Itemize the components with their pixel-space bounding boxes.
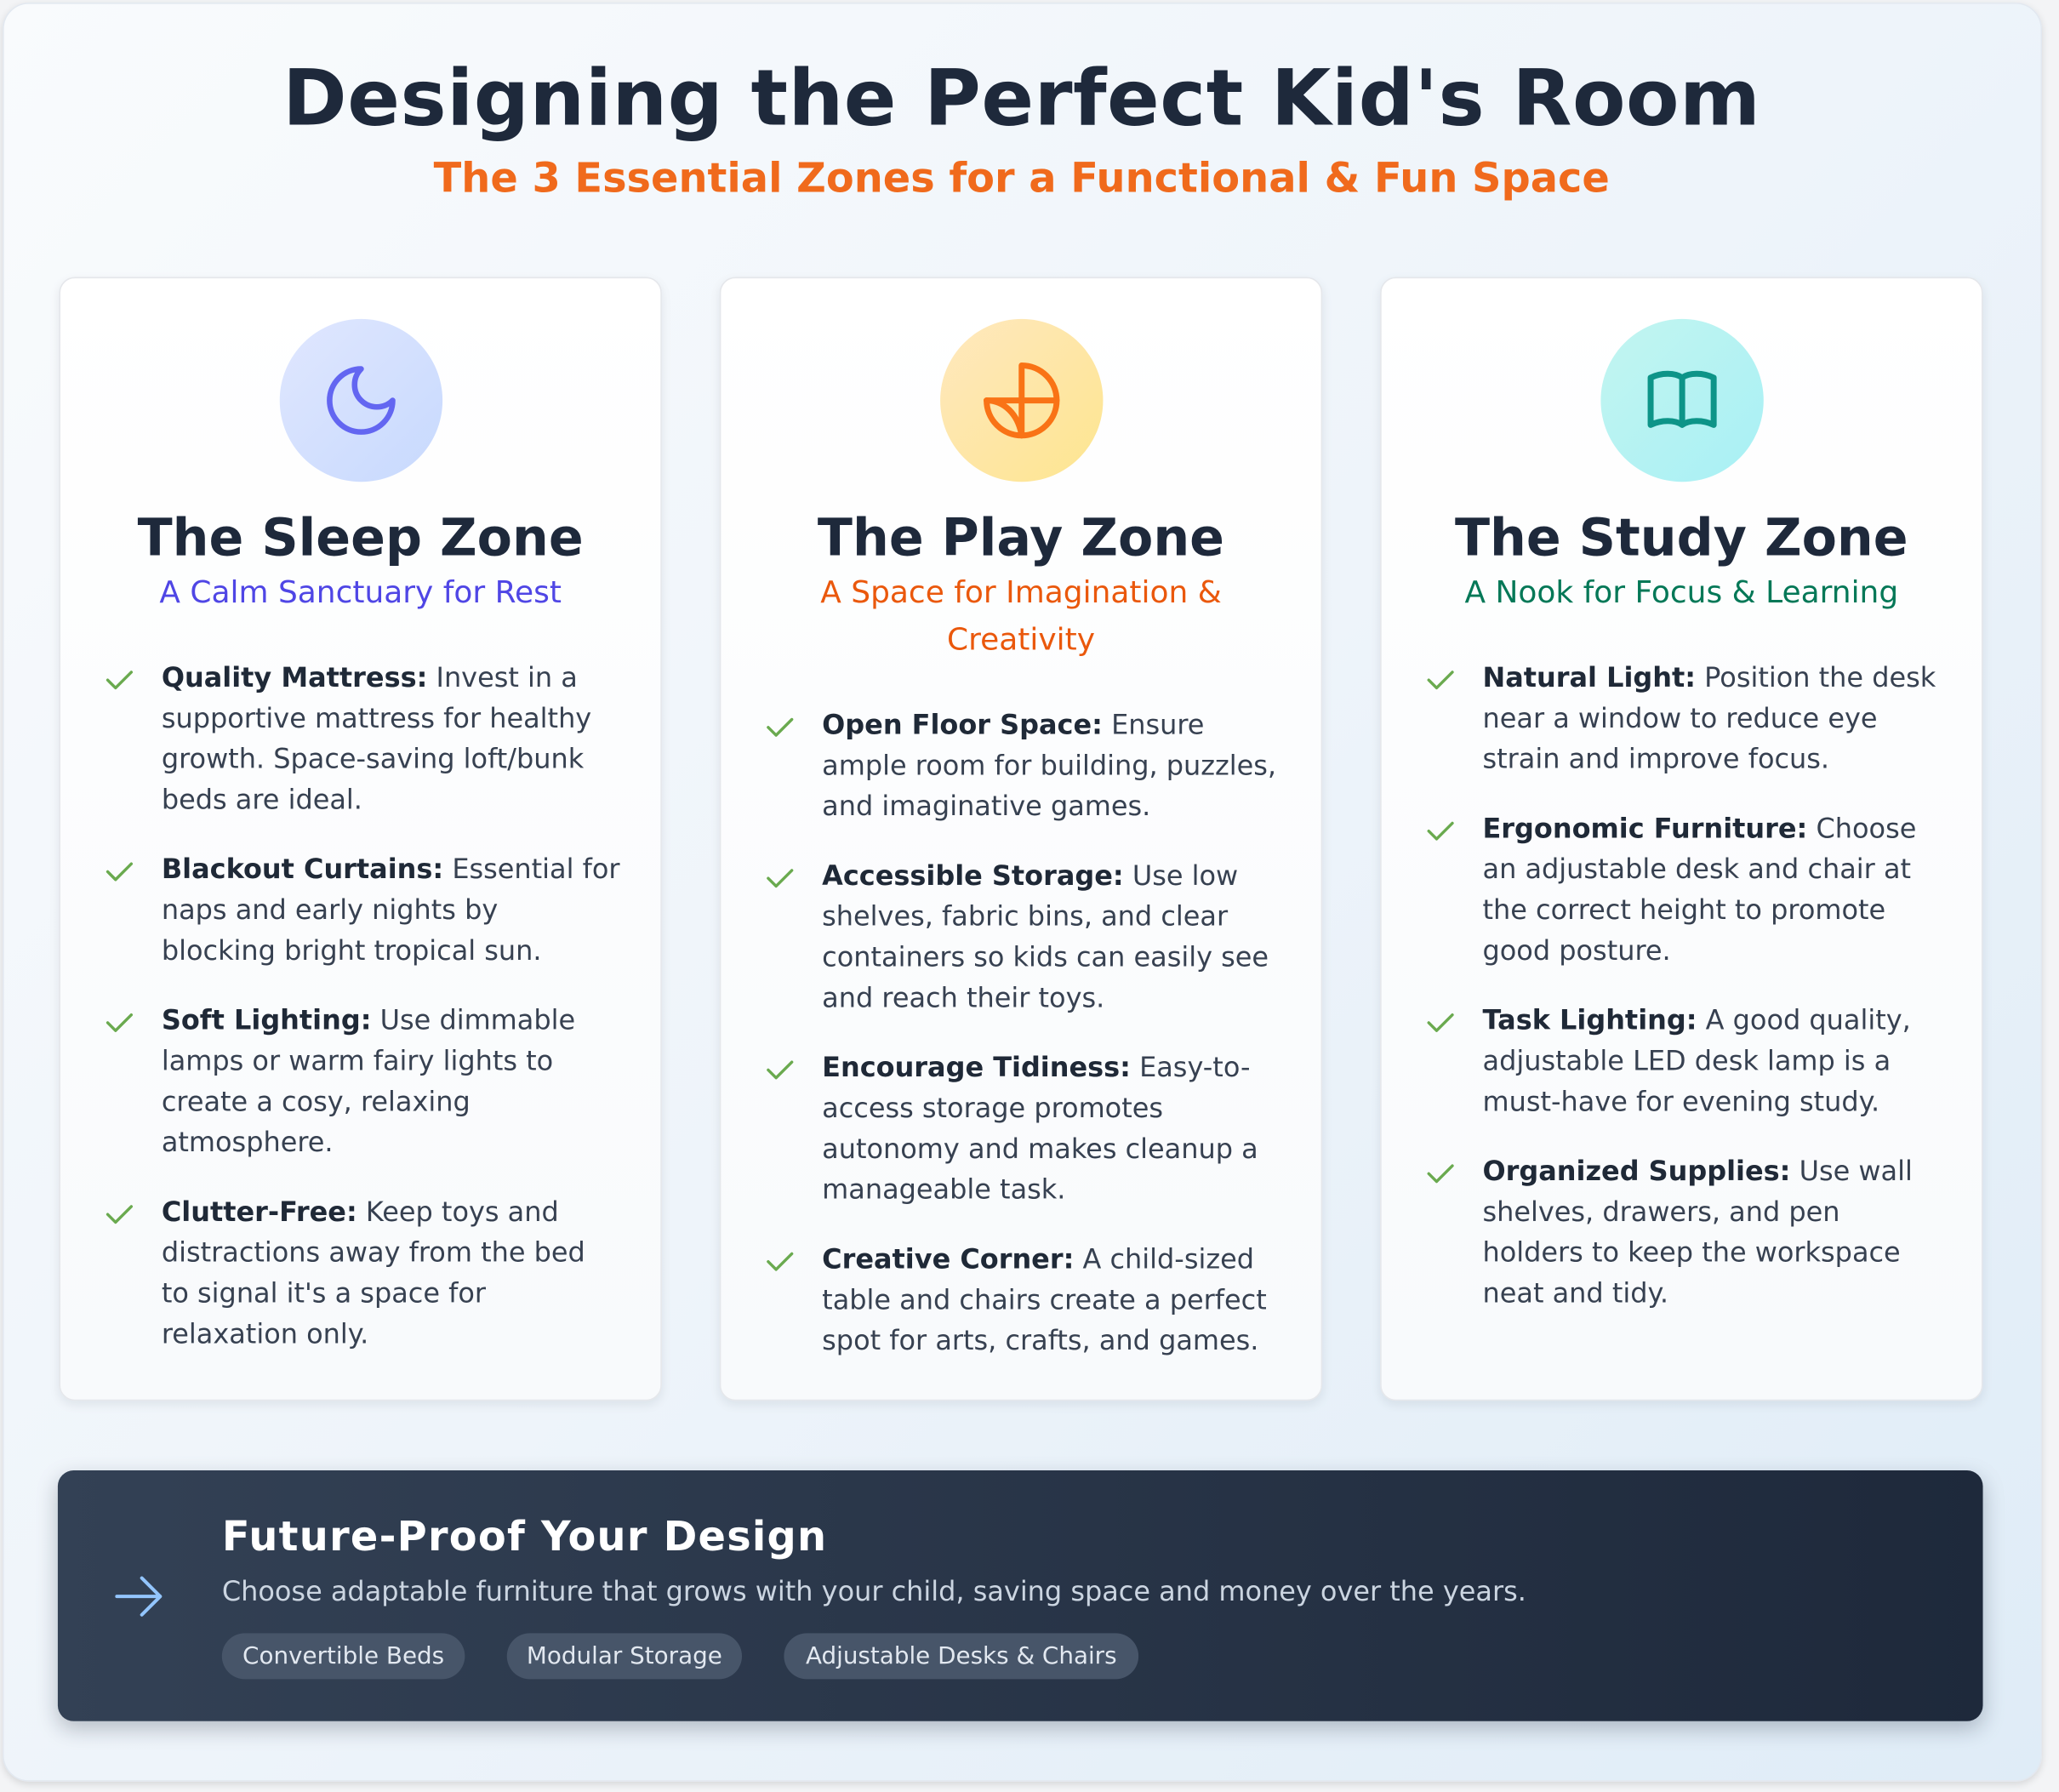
pill: modular storage <box>507 1633 742 1679</box>
list: sleep tips <box>106 662 620 1350</box>
tagline: play <box>820 575 1222 658</box>
icon: play shape <box>940 319 1103 482</box>
list: play tips: autonomy and makes cleanup a <box>822 1133 1258 1165</box>
list: play tips: ample room for building, puzzles, <box>822 750 1276 781</box>
list: play tips: table and chairs create a perfect <box>822 1284 1267 1315</box>
list: study tips: the correct height to promote <box>1482 894 1885 926</box>
list: sleep tips: lamps or warm fairy lights to <box>162 1045 553 1076</box>
list: study tips: Natural Light: Position the desk <box>1482 662 1936 693</box>
list: play tips: Open Floor Space: Ensure <box>822 709 1204 740</box>
panel: sleep zone <box>59 277 662 1401</box>
list: study tips: neat and tidy. <box>1482 1277 1668 1309</box>
heading: study zone: The Study Zone <box>1455 510 1908 568</box>
list: sleep tips: distractions away from the bed <box>162 1236 585 1268</box>
list: study tips: Ergonomic Furniture: Choose <box>1482 813 1916 844</box>
list: study tips: adjustable LED desk lamp is a <box>1482 1045 1891 1076</box>
list: play tips: spot for arts, crafts, and games. <box>822 1325 1258 1356</box>
list: play tips: and reach their toys. <box>822 982 1104 1013</box>
list: sleep tips: beds are ideal. <box>162 784 362 815</box>
title: Designing the Perfect Kid's Room <box>282 53 1760 143</box>
list: sleep tips: naps and early nights by <box>162 894 498 926</box>
list: study tips <box>1427 662 1936 1309</box>
pill: convertible beds: Convertible Beds <box>242 1642 444 1670</box>
list: sleep tips: Soft Lighting: Use dimmable <box>162 1004 575 1036</box>
heading: play zone: The Play Zone <box>818 510 1224 568</box>
icon: moon <box>280 319 442 482</box>
list: sleep tips: Quality Mattress: Invest in a <box>162 662 578 693</box>
pill: modular storage: Modular Storage <box>527 1642 722 1670</box>
list: play tips: access storage promotes <box>822 1093 1163 1124</box>
icon: arrow <box>115 1576 162 1617</box>
banner: future-proof <box>58 1470 1983 1721</box>
tagline: study: A Nook for Focus & Learning <box>1464 575 1898 610</box>
list: study tips: shelves, drawers, and pen <box>1482 1196 1840 1228</box>
list: sleep tips: Blackout Curtains: Essential for <box>162 853 620 885</box>
panel: study zone <box>1380 277 1983 1401</box>
banner text: Choose adaptable furniture that grows with your child, saving space and money over the years. <box>222 1575 1526 1607</box>
list: play tips: shelves, fabric bins, and clear <box>822 900 1228 932</box>
banner heading: Future-Proof Your Design <box>222 1514 827 1561</box>
list: play tips: manageable task. <box>822 1173 1065 1205</box>
list: study tips: an adjustable desk and chair at <box>1482 853 1911 885</box>
list: study tips: Organized Supplies: Use wall <box>1482 1156 1913 1187</box>
tagline: play: A Space for Imagination & <box>820 575 1222 610</box>
heading: sleep zone: The Sleep Zone <box>138 510 584 568</box>
pill: adjustable desks: Adjustable Desks & Chairs <box>806 1642 1117 1670</box>
list: play tips: and imaginative games. <box>822 790 1150 822</box>
list: study tips: near a window to reduce eye <box>1482 702 1878 733</box>
pill: adjustable desks <box>784 1633 1138 1679</box>
list: sleep tips: Clutter-Free: Keep toys and <box>162 1196 559 1228</box>
icon: book <box>1600 319 1764 482</box>
list: study tips: holders to keep the workspace <box>1482 1236 1901 1268</box>
list: study tips: Task Lighting: A good quality, <box>1482 1004 1911 1036</box>
list: sleep tips: to signal it's a space for <box>162 1277 486 1309</box>
list: sleep tips: growth. Space-saving loft/bunk <box>162 743 584 774</box>
list: sleep tips: supportive mattress for healthy <box>162 702 591 733</box>
list: sleep tips: atmosphere. <box>162 1127 334 1158</box>
list: study tips: must-have for evening study. <box>1482 1086 1879 1117</box>
tagline: sleep: A Calm Sanctuary for Rest <box>159 575 562 610</box>
list: sleep tips: relaxation only. <box>162 1318 368 1350</box>
list: study tips: strain and improve focus. <box>1482 743 1829 774</box>
list: play tips <box>767 709 1276 1356</box>
list: sleep tips: create a cosy, relaxing <box>162 1086 471 1117</box>
tagline: play: Creativity <box>947 622 1095 658</box>
panel: play zone <box>720 277 1322 1401</box>
list: play tips: Encourage Tidiness: Easy-to- <box>822 1052 1250 1083</box>
list: play tips: containers so kids can easily see <box>822 941 1269 973</box>
list: sleep tips: blocking bright tropical sun. <box>162 935 542 967</box>
list: play tips: Accessible Storage: Use low <box>822 860 1238 892</box>
list: study tips: good posture. <box>1482 935 1671 967</box>
subtitle: The 3 Essential Zones for a Functional & Fun Space <box>434 155 1610 203</box>
list: play tips: Creative Corner: A child-sized <box>822 1243 1254 1275</box>
pill: convertible beds <box>222 1633 465 1679</box>
